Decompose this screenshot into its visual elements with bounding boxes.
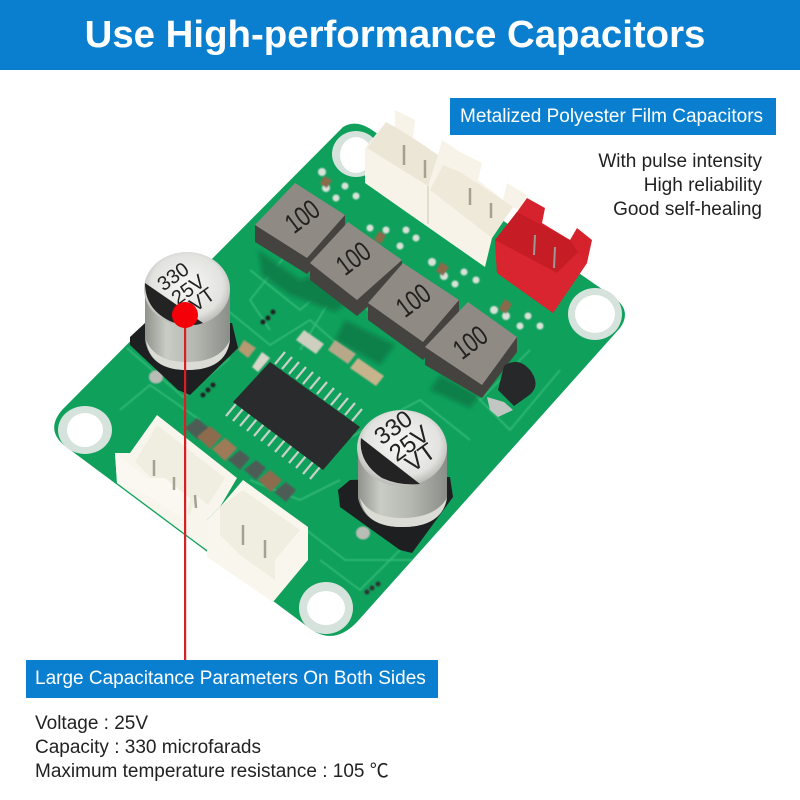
transistor <box>487 362 536 417</box>
capacitor, left: 330 25V VT: VT <box>186 284 219 317</box>
label: large capacitance parameters <box>26 660 438 698</box>
label: metalized polyester film capacitors: Metalized Polyester Film Capacitors <box>460 106 763 127</box>
white connector, bottom right <box>207 480 308 602</box>
capacitor, right: 330 25V VT: VT <box>400 438 441 478</box>
resistor row beneath the IC <box>185 418 296 502</box>
board traces <box>120 250 560 590</box>
circuit board body <box>54 124 625 636</box>
title banner <box>0 0 800 70</box>
specification list: Capacity : 330 microfarads <box>35 737 261 758</box>
capacitor, right: 330 25V VT <box>357 405 447 527</box>
mounting holes <box>58 131 622 634</box>
small SMD parts <box>149 168 544 594</box>
inductors labelled 100 <box>255 183 517 398</box>
capacitor pad, left <box>130 323 238 395</box>
feature list: film capacitors <box>598 151 762 220</box>
feature list: film capacitors: With pulse intensity <box>598 151 762 172</box>
capacitor, right: 330 25V VT: 330 <box>369 405 418 451</box>
inductor 3 <box>368 263 459 360</box>
capacitor, left: 330 25V VT: 330 <box>154 258 193 296</box>
white connector, bottom left <box>115 415 237 550</box>
label: metalized polyester film capacitors <box>450 98 776 135</box>
inductor 2 <box>310 222 402 316</box>
inductor 4 <box>425 302 517 398</box>
specification list: Voltage : 25V <box>35 713 148 734</box>
capacitor, left: 330 25V VT: 25V <box>168 270 210 310</box>
darker board regions <box>258 250 480 408</box>
capacitor, right: 330 25V VT: 25V <box>384 420 435 467</box>
inductor 2: 100 <box>331 237 377 282</box>
capacitor pad, right <box>338 477 453 553</box>
inductor 4: 100 <box>448 321 494 366</box>
capacitor, left: 330 25V VT <box>144 252 230 370</box>
feature list: film capacitors: High reliability <box>644 175 762 196</box>
label: large capacitance parameters: Large Capacitance Parameters On Both Sides <box>35 668 426 689</box>
feature list: film capacitors: Good self-healing <box>613 199 762 220</box>
integrated circuit <box>226 352 362 479</box>
inductor 1: 100 <box>280 195 326 240</box>
specification list: Maximum temperature resistance : 105 ℃ <box>35 761 389 782</box>
title banner: Use High-performance Capacitors <box>85 13 705 56</box>
inductor 1 <box>255 183 345 274</box>
callout pointer: red dot and leader line <box>172 302 198 661</box>
specification list <box>35 713 389 782</box>
red connector <box>495 198 592 313</box>
inductor 3: 100 <box>391 279 437 324</box>
white connector, top <box>365 110 527 267</box>
